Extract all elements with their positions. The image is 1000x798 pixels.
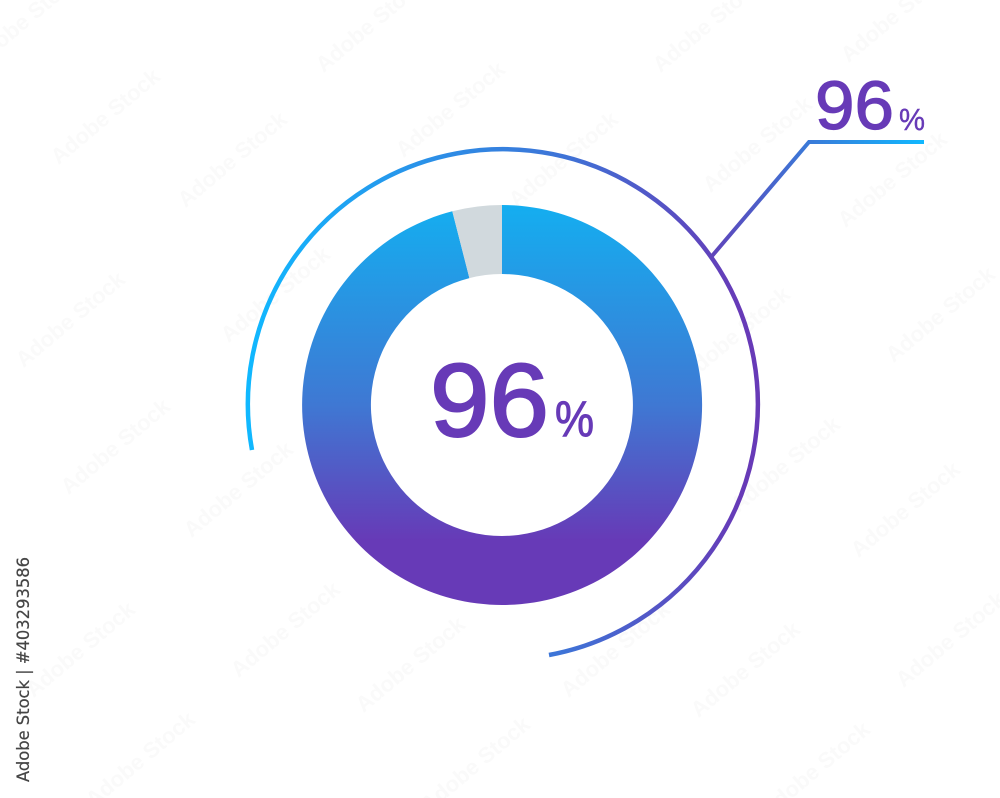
background watermark: repeated Adobe Stock: Adobe Stock xyxy=(556,596,675,702)
background watermark: repeated Adobe Stock: Adobe Stock xyxy=(56,393,175,499)
leader line to callout xyxy=(712,142,924,256)
callout value: 96%: % xyxy=(899,102,925,137)
donut segment: 96 percent xyxy=(302,205,702,605)
center value: 96%: % xyxy=(555,391,594,447)
donut segment: remaining 4 percent xyxy=(452,205,502,278)
background watermark: repeated Adobe Stock: Adobe Stock xyxy=(686,616,805,722)
background watermark: repeated Adobe Stock: Adobe Stock xyxy=(179,436,298,542)
background watermark: repeated Adobe Stock: Adobe Stock xyxy=(173,106,292,212)
outer gradient arc xyxy=(248,149,758,655)
center value: 96%: 96 xyxy=(430,343,549,459)
background watermark: repeated Adobe Stock: Adobe Stock xyxy=(226,576,345,682)
background watermark: repeated Adobe Stock: Adobe Stock xyxy=(216,241,335,347)
background watermark: repeated Adobe Stock: Adobe Stock xyxy=(21,596,140,702)
background watermark: repeated Adobe Stock: Adobe Stock xyxy=(833,126,952,232)
background watermark: repeated Adobe Stock: Adobe Stock xyxy=(698,91,817,197)
stock credit text: Adobe Stock | #403293586 xyxy=(14,557,33,782)
callout value: 96%: 96 xyxy=(815,67,894,144)
background watermark: repeated Adobe Stock: Adobe Stock xyxy=(11,266,130,372)
background watermark: repeated Adobe Stock: Adobe Stock xyxy=(391,56,510,162)
background watermark: repeated Adobe Stock: Adobe Stock xyxy=(504,106,623,212)
background watermark: repeated Adobe Stock: Adobe Stock xyxy=(846,456,965,562)
background watermark: repeated Adobe Stock: Adobe Stock xyxy=(726,411,845,517)
background watermark: repeated Adobe Stock: Adobe Stock xyxy=(881,261,1000,367)
background watermark: repeated Adobe Stock: Adobe Stock xyxy=(351,611,470,717)
callout value: 96% xyxy=(815,67,925,144)
background watermark: repeated Adobe Stock: Adobe Stock xyxy=(676,281,795,387)
background watermark: repeated Adobe Stock: Adobe Stock xyxy=(46,63,165,169)
donut chart xyxy=(302,205,702,605)
